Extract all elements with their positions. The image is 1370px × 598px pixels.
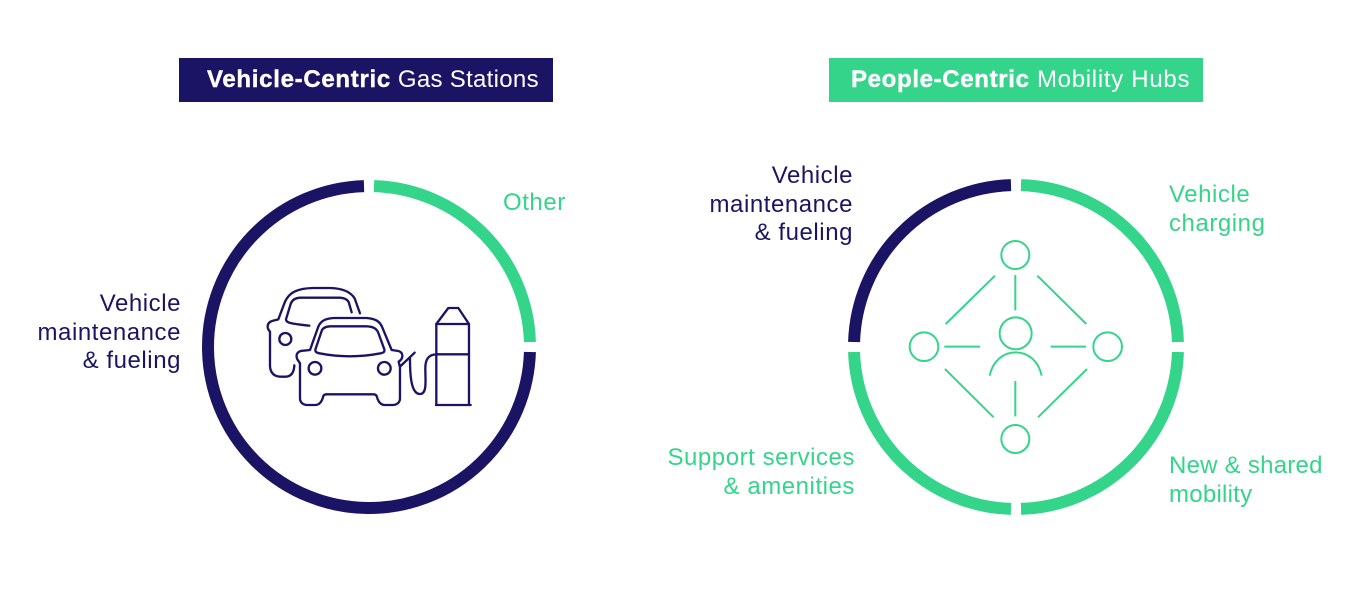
heading: vehicle-centric gas stations: Vehicle-Centric Gas Stations [207, 66, 539, 93]
label: new and shared mobility: mobility [1169, 480, 1252, 508]
icon: person connected to a mobility network [910, 241, 1122, 453]
label: vehicle maintenance and fueling (mobility hubs): & fueling [755, 219, 853, 246]
label: vehicle maintenance and fueling (gas stations): Vehicle [100, 290, 181, 317]
label: vehicle maintenance and fueling (gas stations) [38, 290, 181, 374]
label: support services and amenities [667, 444, 855, 500]
label: vehicle charging: charging [1169, 210, 1265, 236]
label: support services and amenities: Support services [667, 444, 855, 471]
label: vehicle maintenance and fueling (gas stations): maintenance [38, 318, 181, 346]
icon: cars at a fuel pump [268, 288, 471, 405]
donut chart: mobility hubs [854, 185, 1178, 509]
label: vehicle maintenance and fueling (gas stations): & fueling [83, 347, 181, 374]
label: vehicle charging: Vehicle [1169, 181, 1250, 208]
label: vehicle maintenance and fueling (mobility hubs): maintenance [710, 190, 853, 218]
label: other: Other [503, 189, 566, 216]
donut chart: gas stations [208, 186, 530, 508]
heading: people-centric mobility hubs: People-Centric Mobility Hubs [851, 66, 1190, 93]
label: support services and amenities: & amenities [724, 472, 855, 500]
label: vehicle maintenance and fueling (mobility hubs) [710, 162, 853, 246]
heading: people-centric mobility hubs [829, 58, 1203, 102]
label: new and shared mobility [1169, 452, 1323, 508]
heading: vehicle-centric gas stations [179, 58, 553, 102]
label: vehicle charging [1169, 181, 1265, 236]
label: vehicle maintenance and fueling (mobility hubs): Vehicle [772, 162, 853, 189]
label: new and shared mobility: New & shared [1169, 452, 1323, 479]
